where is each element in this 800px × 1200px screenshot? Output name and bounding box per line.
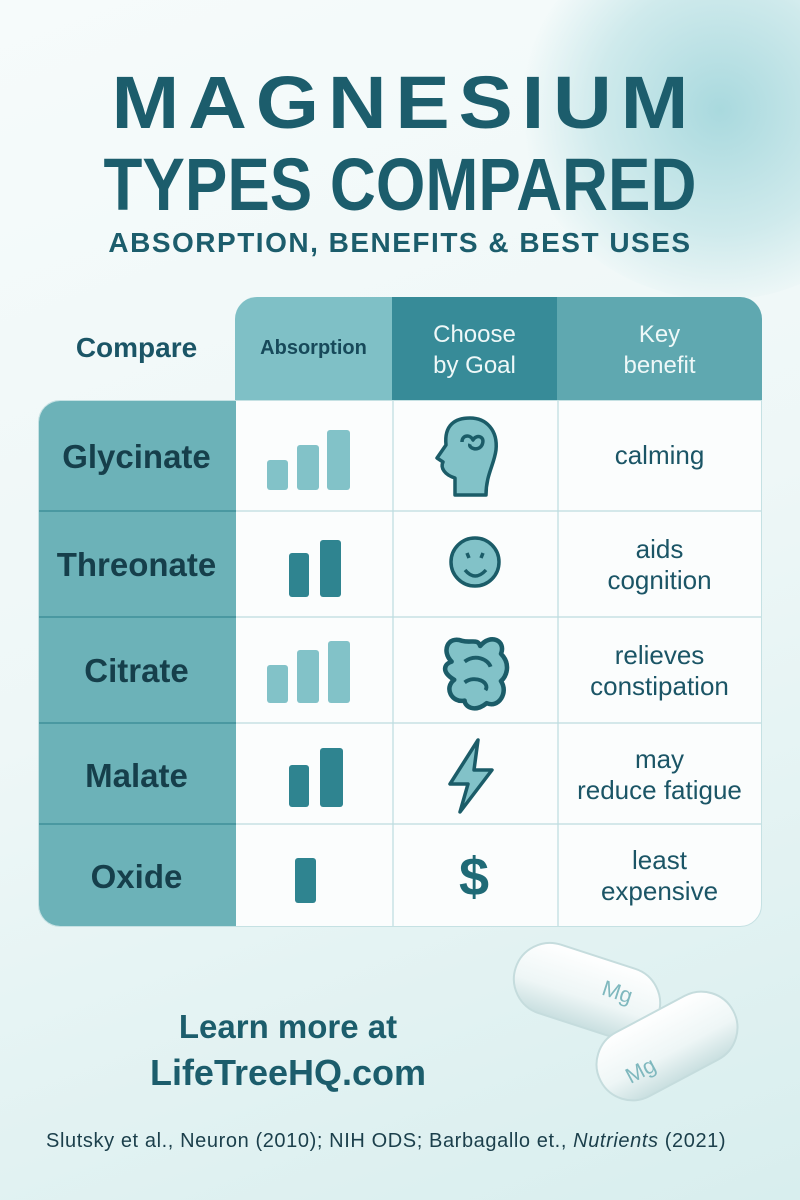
- header: choose by goal: by Goal: [433, 352, 516, 379]
- header: absorption: Absorption: [260, 337, 367, 359]
- header: choose by goal: [392, 297, 557, 400]
- key benefits: calming: [615, 440, 704, 470]
- key benefits: constipation: [590, 671, 729, 701]
- header: absorption: [235, 297, 392, 400]
- title: [104, 61, 697, 226]
- call to action: Learn more at: [179, 1008, 397, 1045]
- body: [38, 400, 762, 927]
- call to action: LifeTreeHQ.com: [150, 1052, 426, 1093]
- header: key benefit: benefit: [623, 352, 696, 379]
- key benefits: aids: [636, 534, 683, 564]
- absorption bars and icons: Mg: [599, 975, 636, 1008]
- bars: glycinate: [267, 430, 350, 490]
- bars: threonate: [289, 540, 341, 597]
- icon: head: [437, 418, 496, 495]
- header: compare: Compare: [76, 332, 197, 363]
- table: [38, 297, 762, 927]
- icon: smiley: [451, 538, 499, 586]
- key benefits: relieves: [615, 640, 704, 670]
- key benefits: least: [632, 845, 687, 875]
- subtitle: ABSORPTION, BENEFITS & BEST USES: [108, 227, 692, 258]
- key benefits: expensive: [601, 876, 718, 906]
- title: TYPES COMPARED: [104, 143, 696, 226]
- bars: oxide: [295, 858, 316, 903]
- text: Oxide: [91, 858, 182, 895]
- header: choose by goal: Choose: [433, 321, 516, 348]
- absorption bars and icons: Mg: [621, 1052, 660, 1089]
- citation: Slutsky et al., Neuron (2010); NIH ODS; Barbagallo et., Nutrients (2021): [46, 1130, 726, 1152]
- icon: intestine: [445, 639, 507, 708]
- text: Malate: [85, 757, 188, 794]
- icon: dollar: $: [459, 847, 489, 907]
- icon: lightning: [450, 740, 492, 812]
- name column: [39, 401, 236, 928]
- header row: [235, 297, 762, 400]
- key benefits: cognition: [607, 565, 712, 595]
- key benefits: reduce fatigue: [577, 775, 742, 805]
- header: key benefit: [557, 297, 762, 400]
- decorative background glow: [520, 0, 800, 300]
- key benefits: [577, 440, 742, 906]
- title: MAGNESIUM: [112, 61, 697, 144]
- call to action: [150, 1008, 426, 1093]
- bars: malate: [289, 748, 343, 807]
- text: Threonate: [57, 546, 216, 583]
- bars: citrate: [267, 641, 350, 703]
- text: Citrate: [84, 652, 189, 689]
- header: key benefit: Key: [639, 321, 680, 348]
- key benefits: may: [635, 744, 684, 774]
- row names: Glycinate: [62, 438, 211, 475]
